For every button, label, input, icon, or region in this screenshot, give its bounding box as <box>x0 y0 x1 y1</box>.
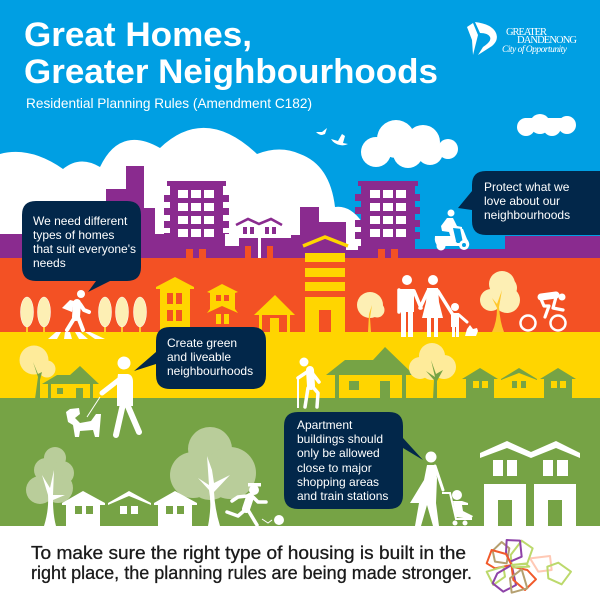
person on scooter <box>435 210 469 250</box>
speech bubble: apartment buildings: shopping areas <box>297 475 379 489</box>
yellow tower <box>303 237 348 332</box>
logo: Greater Dandenong: City of Opportunity <box>502 44 568 55</box>
speech bubble: apartment buildings <box>284 412 423 509</box>
subtitle: Residential Planning Rules (Amendment C182) <box>26 95 312 111</box>
sky background <box>0 0 600 260</box>
purple townhouses <box>225 219 307 258</box>
family <box>399 275 478 337</box>
speech bubble: different homes <box>22 201 141 292</box>
three small white houses <box>62 491 197 526</box>
purple apartment block 1 <box>164 181 229 246</box>
large white duplex <box>480 441 580 526</box>
man walking dog <box>66 356 139 437</box>
pale tree yellow band <box>409 343 456 399</box>
row of pale trees <box>20 297 146 332</box>
speech bubble: apartment buildings: and train stations <box>297 489 388 503</box>
speech bubble: apartment buildings: Apartment <box>297 418 353 432</box>
birds <box>316 128 348 145</box>
speech bubble: apartment buildings: only be allowed <box>297 446 380 460</box>
speech bubble: apartment buildings: close to major <box>297 461 372 475</box>
crosswalk <box>48 332 105 339</box>
pale green tree left <box>26 447 74 526</box>
speech bubble: protect: love about our <box>484 194 560 208</box>
speech bubble: green and liveable <box>134 327 266 389</box>
speech bubble: protect: neighbourhoods <box>484 208 570 222</box>
cyclist <box>520 294 566 330</box>
logo: Greater Dandenong: GREATER <box>506 27 547 38</box>
speech bubble: green and liveable: and liveable <box>167 350 231 364</box>
pedestrian with backpack <box>62 290 89 330</box>
logo: coloured house outlines <box>487 540 571 593</box>
woman with stroller <box>410 452 473 526</box>
yellow band tree <box>20 346 56 399</box>
yellow band <box>0 332 600 398</box>
speech bubble: protect: Protect what we <box>484 180 570 194</box>
footer text <box>31 542 472 583</box>
top-right cloud <box>517 114 576 136</box>
logo: Greater Dandenong: DANDENONG <box>517 35 577 46</box>
footer text: To make sure the right type of housing is built in the <box>31 542 466 563</box>
three small green houses <box>462 368 576 399</box>
orange chimneys <box>186 246 398 259</box>
speech bubble: different homes: types of homes <box>33 228 114 242</box>
title: Great Homes, <box>24 16 252 54</box>
green house yellow band <box>42 366 99 398</box>
speech bubble: different homes: needs <box>33 256 66 270</box>
title: Greater Neighbourhoods <box>24 53 438 91</box>
pale tree orange band <box>357 292 384 332</box>
orange band <box>0 258 600 332</box>
small cloud <box>361 120 458 168</box>
speech bubble: apartment buildings: buildings should <box>297 432 383 446</box>
older man with cane <box>297 358 319 408</box>
yellow house 2 <box>207 284 238 324</box>
speech bubble: protect <box>458 171 600 235</box>
speech bubble: green and liveable: Create green <box>167 336 237 350</box>
green band <box>0 398 600 526</box>
large green house <box>326 347 414 399</box>
speech bubble: different homes: that suit everyone's <box>33 242 136 256</box>
footer text: right place, the planning rules are being made stronger. <box>31 562 472 583</box>
purple stepped building right <box>300 207 346 250</box>
speech bubble: different homes: We need different <box>33 214 128 228</box>
purple stepped building left <box>106 166 155 236</box>
purple apartment block 2 <box>355 181 420 254</box>
purple band <box>0 234 600 258</box>
yellow house 1 <box>156 277 194 332</box>
child running with ball <box>227 483 284 525</box>
large pale tree <box>480 271 520 332</box>
title <box>24 16 438 91</box>
speech bubble: green and liveable: neighbourhoods <box>167 364 253 378</box>
logo: Greater Dandenong <box>467 22 577 55</box>
large cloud <box>0 128 362 258</box>
yellow house 3 <box>254 295 295 332</box>
pale green tree right <box>170 427 256 526</box>
